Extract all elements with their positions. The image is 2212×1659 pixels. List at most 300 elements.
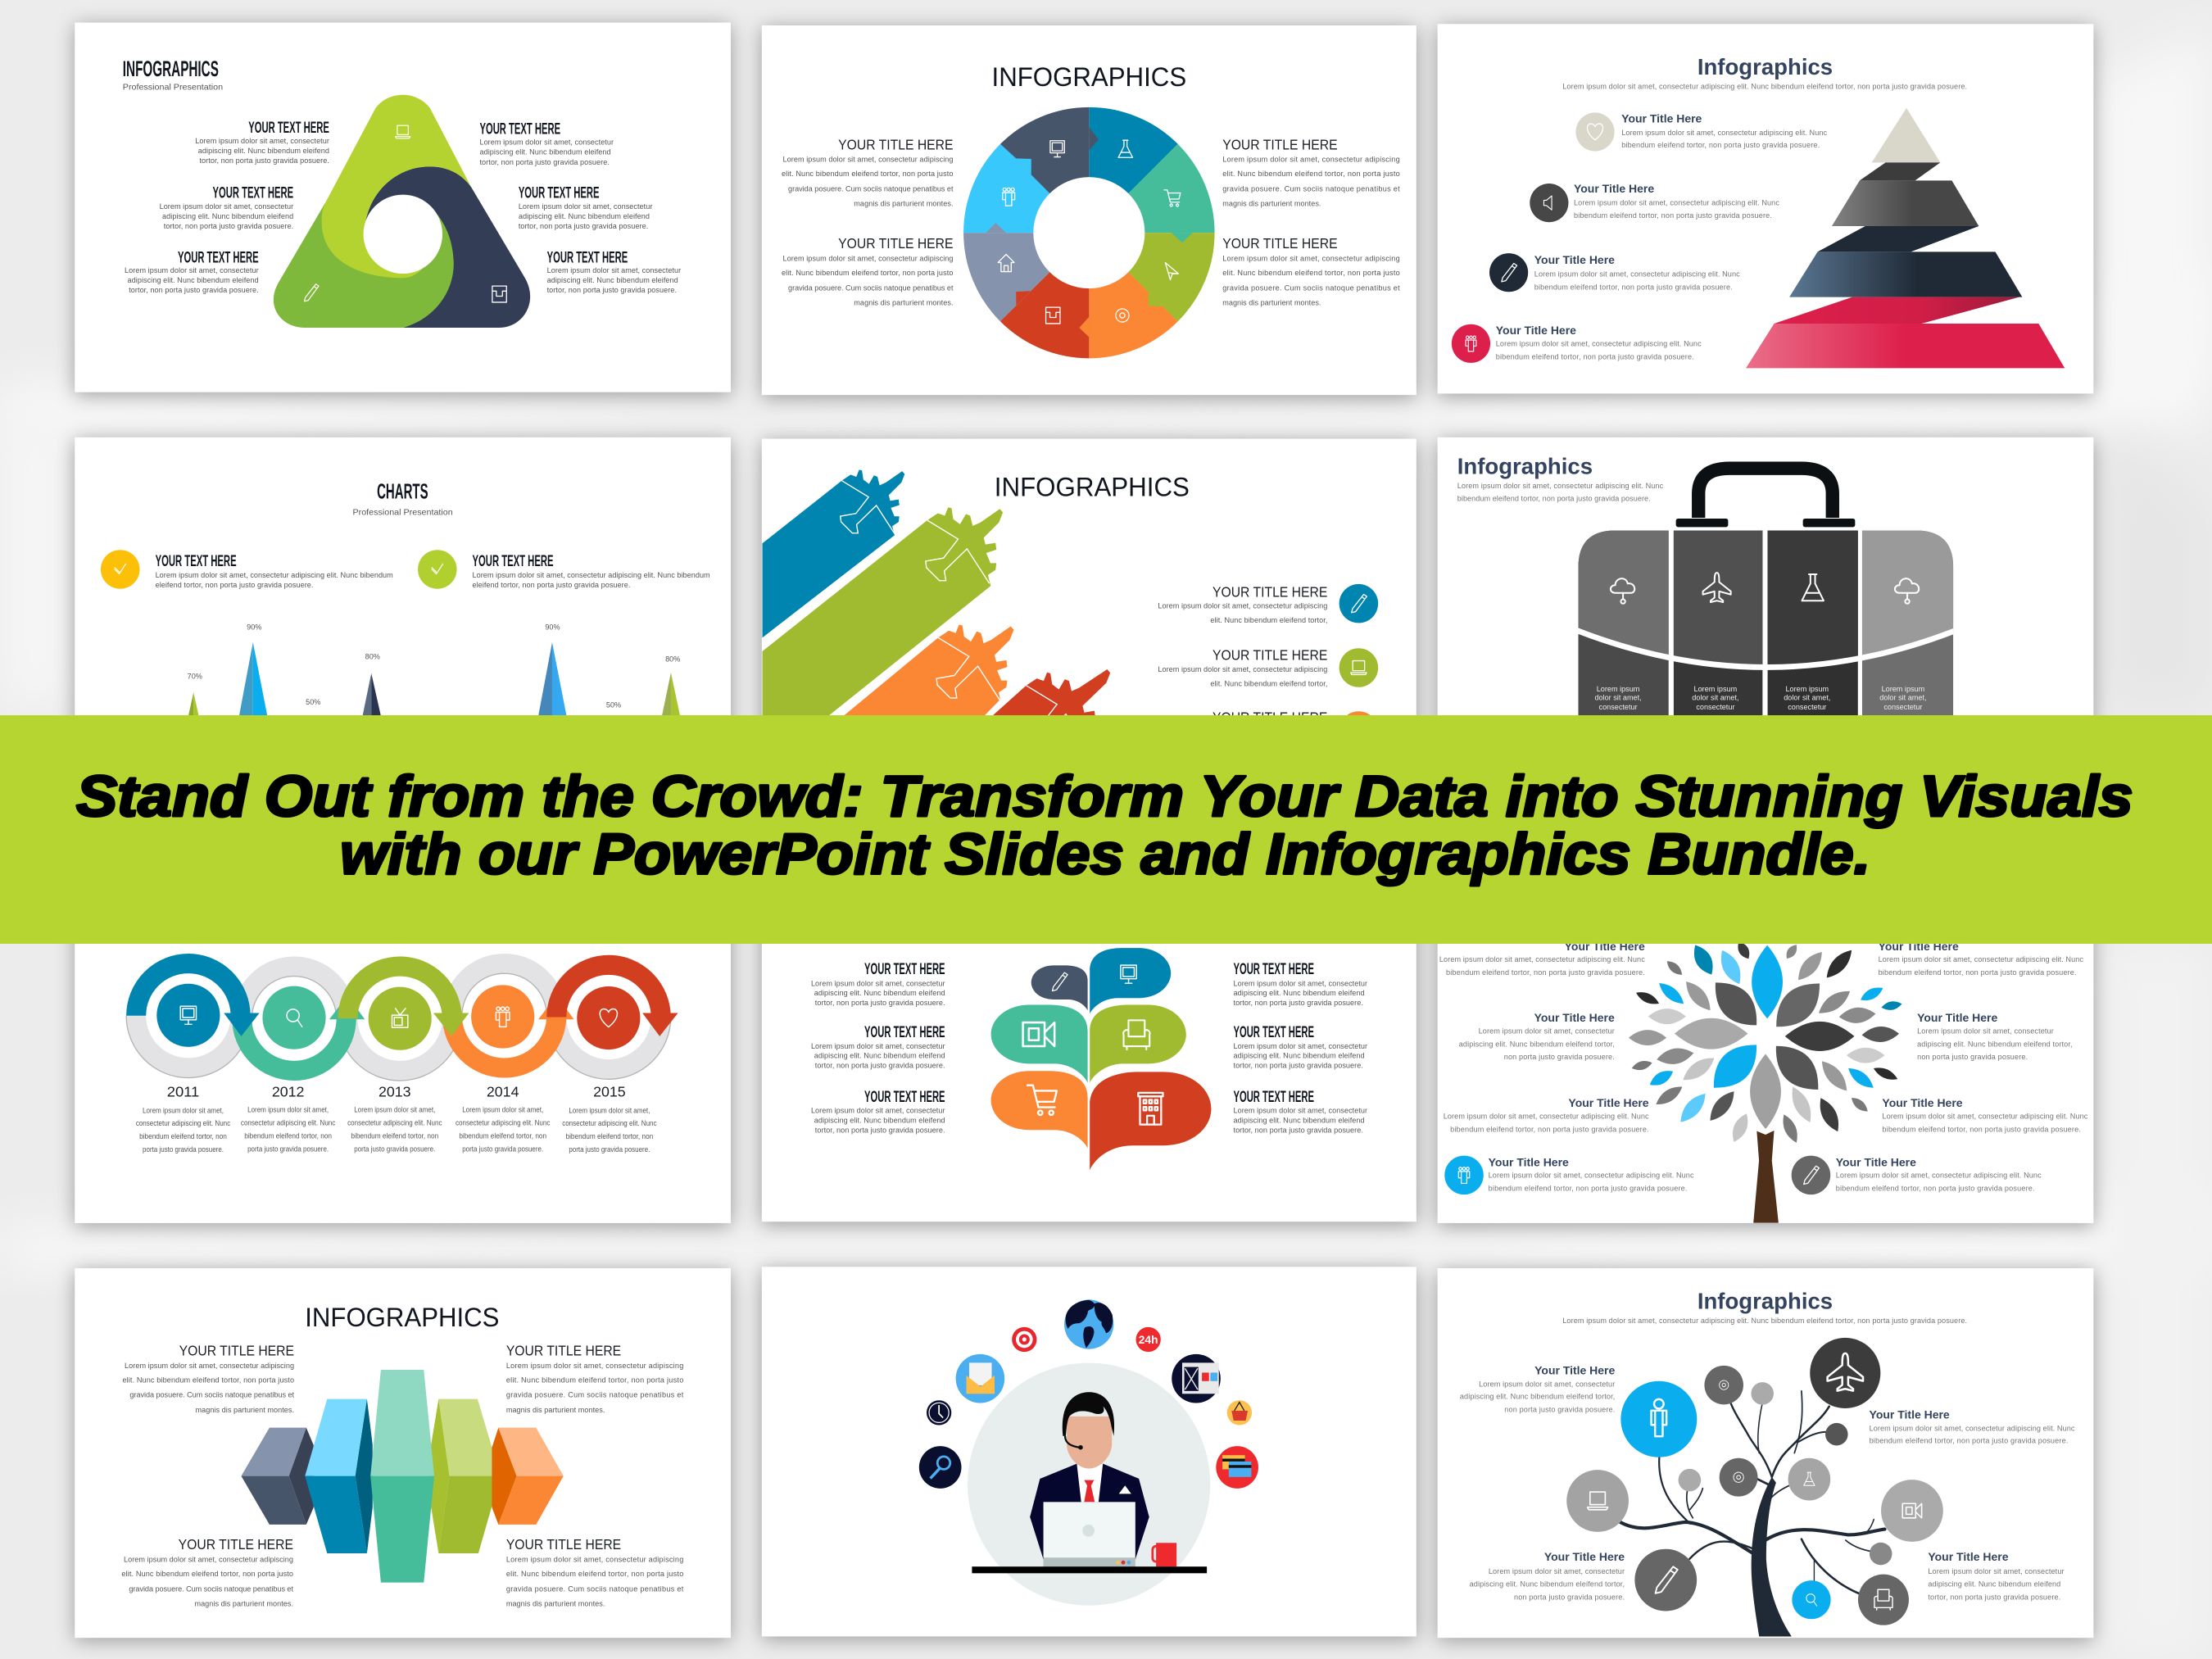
text block: left three <box>125 248 259 294</box>
panel: branch tree <box>1438 1268 2093 1641</box>
item: orange: YOUR TITLE HERE <box>1213 709 1327 726</box>
column text: Lorem ipsum <box>1694 685 1737 693</box>
item: orange <box>1213 709 1378 750</box>
text block: right two: Lorem ipsum dolor sit amet, consectetur <box>1233 1042 1367 1050</box>
icon: inbox <box>1046 307 1060 324</box>
text block: top right: YOUR TITLE HERE <box>1222 137 1338 153</box>
node: 2014: Lorem ipsum dolor sit amet, <box>462 1106 543 1114</box>
text block: top right: bibendum eleifend tortor, non porta justo gravida posuere. <box>1879 968 2077 977</box>
item: heart <box>1575 112 1828 152</box>
item: green check: Lorem ipsum dolor sit amet, consectetur adipiscing elit. Nunc bibendum <box>473 571 710 579</box>
icon: target <box>1012 1327 1036 1352</box>
text block: right two <box>1233 1023 1367 1070</box>
spike chart: 70% <box>188 672 202 680</box>
text block: bottom right: YOUR TITLE HERE <box>506 1536 621 1552</box>
arrow: blue <box>136 963 260 1036</box>
text block: bottom left: magnis dis parturient montes. <box>854 298 954 306</box>
text block: bottom right: adipiscing elit. Nunc bibendum eleifend <box>1928 1580 2060 1589</box>
panel: pyramid infographic <box>1438 24 2093 397</box>
node: 2014: bibendum eleifend tortor, non <box>459 1132 546 1140</box>
text block: lower left: Your Title Here <box>1568 1097 1649 1109</box>
text block: lower left: bibendum eleifend tortor, non porta justo gravida posuere. <box>1450 1126 1649 1134</box>
text block: right two: YOUR TEXT HERE <box>1233 1023 1314 1041</box>
panel: timeline <box>75 846 731 1226</box>
item: people: bibendum eleifend tortor, non porta justo gravida posuere. <box>1496 352 1694 360</box>
panel: charts <box>75 437 731 737</box>
node: 2012: Lorem ipsum dolor sit amet, <box>247 1106 329 1114</box>
text block: left three: YOUR TEXT HERE <box>178 248 259 266</box>
icon: house <box>998 254 1014 272</box>
node: 2011: Lorem ipsum dolor sit amet, <box>143 1106 224 1114</box>
icon: airplane <box>1828 1353 1863 1391</box>
item: pencil <box>1489 253 1740 292</box>
text block: bottom left: Your Title Here <box>1544 1551 1625 1563</box>
bubble: pencil <box>1031 965 1088 1010</box>
desk <box>972 1566 1207 1573</box>
text block: middle right: Lorem ipsum dolor sit amet, consectetur <box>1917 1027 2054 1036</box>
item: green: Lorem ipsum dolor sit amet, consectetur adipiscing <box>1158 665 1327 673</box>
text block: middle left: adipiscing elit. Nunc bibendum eleifend tortor, <box>1459 1040 1615 1048</box>
text block: middle left: non porta justo gravida posuere. <box>1504 1053 1615 1061</box>
tree trunk and branches <box>1620 1391 1885 1636</box>
text block: left one: adipiscing elit. Nunc bibendum eleifend <box>198 147 329 155</box>
text block: top right: Your Title Here <box>1879 941 1959 953</box>
bubble: chair <box>1090 1005 1186 1083</box>
spike chart: 80% <box>365 652 380 660</box>
item: people <box>1452 324 1702 363</box>
bubble: cart <box>991 1071 1088 1149</box>
text block: right one <box>479 120 614 166</box>
node: 2012: bibendum eleifend tortor, non <box>244 1132 332 1140</box>
icon: cart <box>1164 190 1181 206</box>
spike chart <box>188 623 680 716</box>
node: 2014: consectetur adipiscing elit. Nunc <box>456 1118 551 1126</box>
heading <box>1562 1289 1967 1325</box>
item: blue people: bibendum eleifend tortor, non porta justo gravida posuere. <box>1489 1184 1687 1192</box>
text block: top left: elit. Nunc bibendum eleifend tortor, non porta justo <box>122 1376 294 1384</box>
heading <box>1457 454 1664 502</box>
text block: bottom left <box>1470 1551 1625 1601</box>
timeline rings <box>126 963 671 1081</box>
text block: top right: Your Title Here <box>1870 1409 1950 1421</box>
icon: gear <box>1734 1472 1743 1482</box>
text block: left two: tortor, non porta justo gravida posuere. <box>164 222 293 230</box>
icon: person <box>1652 1399 1666 1436</box>
text block: top right <box>1870 1409 2075 1445</box>
item: people: Your Title Here <box>1496 324 1576 337</box>
text block: bottom left: magnis dis parturient montes. <box>194 1600 293 1608</box>
text block: middle right: adipiscing elit. Nunc bibendum eleifend tortor, <box>1917 1040 2073 1048</box>
text block: left one: Lorem ipsum dolor sit amet, consectetur <box>195 137 329 145</box>
text block: middle left <box>1459 1012 1615 1061</box>
icon: email <box>956 1354 1004 1403</box>
icon: plane <box>1703 573 1731 602</box>
node: 2011 <box>136 984 231 1154</box>
heading: infographics <box>123 57 223 92</box>
text block: middle left: Lorem ipsum dolor sit amet, consectetur <box>1479 1027 1615 1036</box>
text block: top right: Lorem ipsum dolor sit amet, consectetur adipiscing <box>1222 156 1400 164</box>
text block: right two: Lorem ipsum dolor sit amet, consectetur <box>519 202 652 211</box>
item: pencil: Lorem ipsum dolor sit amet, consectetur adipiscing elit. Nunc <box>1534 270 1740 279</box>
text block: left one: adipiscing elit. Nunc bibendum eleifend <box>814 989 945 997</box>
item: green check: eleifend tortor, non porta justo gravida posuere. <box>473 581 630 589</box>
text block: top left: Your Title Here <box>1565 941 1645 953</box>
text block: right three: YOUR TEXT HERE <box>1233 1088 1314 1106</box>
text block: bottom right: Your Title Here <box>1928 1551 2009 1563</box>
text block: top right: gravida posuere. Cum sociis natoque penatibus et <box>1222 184 1400 193</box>
item: blue: elit. Nunc bibendum eleifend tortor, <box>1210 616 1327 624</box>
icon: credit cards <box>1216 1446 1258 1489</box>
bubble: building <box>1090 1072 1211 1170</box>
text block: middle right <box>1917 1012 2073 1061</box>
text block: top right <box>506 1342 684 1414</box>
stripe: blue <box>763 469 904 637</box>
item: speaker: Your Title Here <box>1574 183 1654 195</box>
icon: cloud <box>1895 578 1919 604</box>
spike chart: 90% <box>545 623 560 631</box>
text block: left one: YOUR TEXT HERE <box>864 960 945 978</box>
text block: bottom right: tortor, non porta justo gravida posuere. <box>1928 1593 2060 1601</box>
item: yellow check: eleifend tortor, non porta justo gravida posuere. <box>156 581 313 589</box>
text block: top left: Your Title Here <box>1534 1364 1615 1376</box>
arrow: green <box>347 967 469 1036</box>
column text: Lorem ipsum <box>1597 685 1639 693</box>
column text: consectetur <box>1599 703 1638 711</box>
text block: top left: Lorem ipsum dolor sit amet, consectetur adipiscing <box>783 156 954 164</box>
text block: bottom right <box>506 1536 684 1608</box>
item: blue: YOUR TITLE HERE <box>1213 583 1327 600</box>
icon: search <box>919 1446 962 1489</box>
bar: teal <box>370 1370 434 1583</box>
item: yellow check: Lorem ipsum dolor sit amet, consectetur adipiscing elit. Nunc bibendum <box>156 571 393 579</box>
bubble: video <box>991 1005 1088 1083</box>
text block: right two: adipiscing elit. Nunc bibendum eleifend <box>519 212 650 220</box>
text block: top right: Lorem ipsum dolor sit amet, consectetur adipiscing <box>506 1362 683 1370</box>
spike chart: 50% <box>606 700 621 709</box>
node: 2011: consectetur adipiscing elit. Nunc <box>136 1119 231 1127</box>
column text: dolor sit amet, <box>1879 694 1927 702</box>
item: blue people <box>1444 1156 1694 1194</box>
text block: bottom left: YOUR TITLE HERE <box>179 1536 293 1552</box>
text block: left two: tortor, non porta justo gravida posuere. <box>815 1062 945 1070</box>
text block: bottom right: Lorem ipsum dolor sit amet, consectetur adipiscing <box>1222 254 1400 262</box>
text block: bottom right: Lorem ipsum dolor sit amet, consectetur <box>1928 1567 2065 1575</box>
item: blue: Lorem ipsum dolor sit amet, consectetur adipiscing <box>1158 601 1327 610</box>
banner headline <box>76 764 2133 886</box>
column text: Lorem ipsum <box>1785 685 1829 693</box>
column text: consectetur <box>1696 703 1734 711</box>
text block: right two <box>519 184 652 230</box>
node: 2015: bibendum eleifend tortor, non <box>565 1132 653 1140</box>
item: yellow check: YOUR TEXT HERE <box>156 552 237 570</box>
text block: right one: adipiscing elit. Nunc bibendum eleifend <box>479 148 611 156</box>
text block: bottom right: elit. Nunc bibendum eleifend tortor, non porta justo <box>1222 269 1400 277</box>
bar: orange <box>492 1428 564 1525</box>
text block: top left: gravida posuere. Cum sociis natoque penatibus et <box>129 1391 294 1399</box>
item: speaker: bibendum eleifend tortor, non porta justo gravida posuere. <box>1574 211 1772 220</box>
panel: 3d bars <box>75 1268 731 1641</box>
text block: bottom left: YOUR TITLE HERE <box>838 235 954 252</box>
icon: video <box>1902 1503 1922 1518</box>
column text: consectetur <box>1788 703 1826 711</box>
text block: bottom right: gravida posuere. Cum sociis natoque penatibus et <box>1222 283 1400 292</box>
text block: top right: elit. Nunc bibendum eleifend tortor, non porta justo <box>1222 170 1400 178</box>
item: speaker: Lorem ipsum dolor sit amet, consectetur adipiscing elit. Nunc <box>1574 199 1779 207</box>
node: 2013: 2013 <box>378 1083 411 1099</box>
text block: bottom left: Lorem ipsum dolor sit amet, consectetur adipiscing <box>783 254 954 262</box>
heading: infographics: Professional Presentation <box>123 83 223 92</box>
item: green check: YOUR TEXT HERE <box>473 552 554 570</box>
text block: bottom left: gravida posuere. Cum sociis natoque penatibus et <box>788 283 954 292</box>
node: 2015 <box>562 986 657 1154</box>
icon: search <box>1806 1594 1817 1606</box>
text block: top right: elit. Nunc bibendum eleifend tortor, non porta justo <box>506 1376 683 1384</box>
item: yellow check <box>101 550 393 589</box>
bar: green <box>431 1399 501 1553</box>
item: blue people: Lorem ipsum dolor sit amet, consectetur adipiscing elit. Nunc <box>1489 1172 1694 1180</box>
item: people: Lorem ipsum dolor sit amet, consectetur adipiscing elit. Nunc <box>1496 340 1702 348</box>
text block: left two: YOUR TEXT HERE <box>864 1023 945 1041</box>
panel: plane stripes <box>762 439 1416 750</box>
text block: right one: adipiscing elit. Nunc bibendum eleifend <box>1233 989 1365 997</box>
item: green: YOUR TITLE HERE <box>1213 647 1327 664</box>
triangle diagram <box>274 95 530 328</box>
briefcase handle <box>1676 469 1855 527</box>
item: green: elit. Nunc bibendum eleifend tortor, <box>1210 679 1327 687</box>
text block: top left <box>122 1342 294 1414</box>
text block: left two: YOUR TEXT HERE <box>212 184 293 202</box>
text block: right one: tortor, non porta justo gravida posuere. <box>479 158 610 166</box>
text block: right three <box>547 248 681 294</box>
icon: pencil <box>304 284 319 301</box>
icon: globe <box>1064 1299 1113 1349</box>
text block: left three: tortor, non porta justo gravida posuere. <box>815 1126 945 1135</box>
banner headline: Stand Out from the Crowd: Transform Your Data into Stunning Visuals <box>76 764 2133 828</box>
text block: bottom right: gravida posuere. Cum sociis natoque penatibus et <box>506 1584 684 1593</box>
text block: top left: non porta justo gravida posuere. <box>1504 1405 1615 1413</box>
text block: top left: bibendum eleifend tortor, non porta justo gravida posuere. <box>1446 968 1645 977</box>
bar: slate <box>241 1428 314 1525</box>
heading: INFOGRAPHICS <box>995 472 1190 502</box>
text block: left one: tortor, non porta justo gravida posuere. <box>815 999 945 1007</box>
icon: gear <box>1116 309 1129 322</box>
icon: laptop <box>1588 1492 1607 1510</box>
icon: cloud <box>1611 578 1634 604</box>
item: gray pencil: Your Title Here <box>1836 1156 1916 1168</box>
text block: bottom right: Lorem ipsum dolor sit amet, consectetur adipiscing <box>506 1556 683 1564</box>
text block: left two: Lorem ipsum dolor sit amet, consectetur <box>160 202 293 211</box>
panel: leaf tree <box>1438 846 2093 1226</box>
text block: bottom left <box>121 1536 293 1608</box>
icon: basket <box>1227 1400 1252 1426</box>
icon: flask <box>1118 140 1132 157</box>
businessman <box>1030 1392 1149 1559</box>
text block: right three: adipiscing elit. Nunc bibendum eleifend <box>1233 1116 1365 1124</box>
icon: inbox <box>492 286 506 302</box>
node: 2012: 2012 <box>272 1083 304 1099</box>
icon: chair <box>1874 1589 1892 1610</box>
text block: bottom left: elit. Nunc bibendum eleifend tortor, non porta justo <box>782 269 954 277</box>
heading: Infographics <box>1698 54 1833 79</box>
red mug <box>1153 1543 1176 1566</box>
text block: left three: YOUR TEXT HERE <box>864 1088 945 1106</box>
text block: top right: magnis dis parturient montes. <box>1222 200 1321 208</box>
text block: top right: bibendum eleifend tortor, non porta justo gravida posuere. <box>1870 1437 2068 1445</box>
node: 2013 <box>347 987 442 1153</box>
donut chart <box>963 107 1215 358</box>
spike chart: 80% <box>665 655 680 664</box>
node: 2014 <box>456 985 551 1153</box>
text block: left three: Lorem ipsum dolor sit amet, consectetur <box>125 266 259 274</box>
bubble: monitor <box>1090 948 1171 1013</box>
heading: INFOGRAPHICS <box>992 61 1186 92</box>
text block: right one: Lorem ipsum dolor sit amet, consectetur <box>479 138 614 147</box>
text block: left one: Lorem ipsum dolor sit amet, consectetur <box>811 979 945 987</box>
item: speaker <box>1530 183 1779 222</box>
node: 2014: porta justo gravida posuere. <box>462 1145 543 1153</box>
text block: top left: YOUR TITLE HERE <box>179 1342 294 1358</box>
panel: speech bubble tree <box>762 846 1416 1225</box>
text block: top left: Lorem ipsum dolor sit amet, consectetur adipiscing elit. Nunc <box>1439 955 1645 963</box>
text block: right three: tortor, non porta justo gravida posuere. <box>1233 1126 1363 1135</box>
branch circles <box>1566 1338 1943 1625</box>
text block: lower left <box>1444 1097 1649 1134</box>
arrow: red <box>556 965 678 1036</box>
text block: left three <box>811 1088 945 1135</box>
text block: bottom right: magnis dis parturient montes. <box>1222 298 1321 306</box>
node: 2015: porta justo gravida posuere. <box>569 1145 650 1154</box>
node: 2013: bibendum eleifend tortor, non <box>351 1132 438 1140</box>
text block: right three: adipiscing elit. Nunc bibendum eleifend <box>547 276 678 284</box>
node: 2015: Lorem ipsum dolor sit amet, <box>569 1106 650 1114</box>
text block: right two: YOUR TEXT HERE <box>519 184 599 202</box>
text block: bottom right: elit. Nunc bibendum eleifend tortor, non porta justo <box>506 1570 683 1578</box>
spike chart: 90% <box>247 623 261 631</box>
icon: flask <box>1802 574 1824 601</box>
icon: pencil <box>1656 1566 1678 1593</box>
text block: right one: Lorem ipsum dolor sit amet, consectetur <box>1233 979 1367 987</box>
tree leaves <box>1629 939 1902 1145</box>
text block: bottom left: elit. Nunc bibendum eleifend tortor, non porta justo <box>121 1570 293 1578</box>
icon: laptop <box>396 125 410 138</box>
text block: lower right: Your Title Here <box>1882 1097 1963 1109</box>
node: 2013: porta justo gravida posuere. <box>354 1145 435 1153</box>
node: 2012: porta justo gravida posuere. <box>247 1145 329 1153</box>
text block: bottom left: Lorem ipsum dolor sit amet, consectetur adipiscing <box>124 1556 293 1564</box>
text block: top left: gravida posuere. Cum sociis natoque penatibus et <box>788 184 954 193</box>
heading: Lorem ipsum dolor sit amet, consectetur adipiscing elit. Nunc bibendum eleifend tortor, non porta justo gravida posuere. <box>1562 83 1967 91</box>
text block: top left <box>782 137 954 208</box>
heading: Lorem ipsum dolor sit amet, consectetur adipiscing elit. Nunc <box>1457 482 1664 490</box>
spike chart: 50% <box>306 698 320 706</box>
text block: bottom left: gravida posuere. Cum sociis natoque penatibus et <box>129 1584 293 1593</box>
text block: left one: YOUR TEXT HERE <box>248 119 329 137</box>
text block: bottom right <box>1222 235 1400 306</box>
text block: top right <box>1222 137 1400 208</box>
item: green check <box>418 550 710 589</box>
item: pencil: bibendum eleifend tortor, non porta justo gravida posuere. <box>1534 283 1733 291</box>
item: pencil: Your Title Here <box>1534 254 1615 266</box>
panel: donut infographic <box>762 25 1416 398</box>
text block: lower right <box>1882 1097 2088 1134</box>
text block: right one: YOUR TEXT HERE <box>479 120 560 138</box>
heading: charts: CHARTS <box>377 481 428 504</box>
stripe: orange <box>843 624 1013 717</box>
column text: dolor sit amet, <box>1594 694 1642 702</box>
item: heart: Your Title Here <box>1621 112 1702 125</box>
item: heart: Lorem ipsum dolor sit amet, consectetur adipiscing elit. Nunc <box>1621 129 1828 137</box>
stripe: red <box>991 669 1110 749</box>
icon: paper plane <box>1165 262 1178 280</box>
text block: lower left: Lorem ipsum dolor sit amet, consectetur adipiscing elit. Nunc <box>1444 1112 1649 1120</box>
heading: INFOGRAPHICS <box>305 1302 499 1332</box>
item: blue <box>1158 583 1378 624</box>
text block: top left <box>1460 1364 1615 1413</box>
arrow: teal <box>242 995 365 1071</box>
column text: dolor sit amet, <box>1784 694 1830 702</box>
text block: left three: tortor, non porta justo gravida posuere. <box>129 286 259 294</box>
column text <box>1594 685 1927 711</box>
column text: consectetur <box>1883 703 1922 711</box>
heading: Infographics <box>1457 454 1593 479</box>
text block: middle right: Your Title Here <box>1917 1012 1997 1024</box>
text block: left two <box>160 184 293 230</box>
text block: top left <box>1439 941 1645 977</box>
node: 2011: bibendum eleifend tortor, non <box>139 1132 227 1140</box>
icon: monitor <box>1050 141 1064 157</box>
item: blue people: Your Title Here <box>1489 1156 1569 1168</box>
pyramid chart <box>1746 108 2065 368</box>
text block: top right: Lorem ipsum dolor sit amet, consectetur adipiscing elit. Nunc <box>1870 1425 2075 1433</box>
text block: left two: Lorem ipsum dolor sit amet, consectetur <box>811 1042 945 1050</box>
text block: bottom right: magnis dis parturient montes. <box>506 1600 605 1608</box>
tree trunk <box>1753 1131 1779 1223</box>
item: gray pencil: Lorem ipsum dolor sit amet, consectetur adipiscing elit. Nunc <box>1836 1172 2042 1180</box>
icon: flask <box>1804 1472 1815 1485</box>
text block: right three: Lorem ipsum dolor sit amet, consectetur <box>1233 1107 1367 1115</box>
text block: top right: YOUR TITLE HERE <box>506 1342 621 1358</box>
heading <box>1562 54 1967 91</box>
text block: lower right: bibendum eleifend tortor, non porta justo gravida posuere. <box>1882 1126 2081 1134</box>
bar: blue <box>305 1399 373 1553</box>
panel: triangle infographic <box>75 23 731 395</box>
icon: browser <box>1172 1354 1221 1403</box>
text block: top left: Lorem ipsum dolor sit amet, consectetur adipiscing <box>125 1362 294 1370</box>
text block: lower right: Lorem ipsum dolor sit amet, consectetur adipiscing elit. Nunc <box>1882 1112 2088 1120</box>
text block: left two <box>811 1023 945 1070</box>
item: heart: bibendum eleifend tortor, non porta justo gravida posuere. <box>1621 141 1820 149</box>
text block: right two: tortor, non porta justo gravida posuere. <box>1233 1062 1363 1070</box>
text block: left one <box>195 119 329 165</box>
text block: right three <box>1233 1088 1367 1135</box>
node: 2012: consectetur adipiscing elit. Nunc <box>241 1118 336 1126</box>
banner headline: with our PowerPoint Slides and Infographics Bundle. <box>340 822 1870 886</box>
node: 2011: 2011 <box>167 1083 199 1099</box>
item: gray pencil <box>1792 1156 2042 1194</box>
banner <box>0 715 2212 944</box>
text block: top right: gravida posuere. Cum sociis natoque penatibus et <box>506 1391 684 1399</box>
text block: right two: tortor, non porta justo gravida posuere. <box>519 222 648 230</box>
text block: middle right: non porta justo gravida posuere. <box>1917 1053 2028 1061</box>
panel: businessman illustration <box>762 1267 1416 1639</box>
text block: left three: adipiscing elit. Nunc bibendum eleifend <box>127 276 259 284</box>
node: 2013: consectetur adipiscing elit. Nunc <box>347 1118 442 1126</box>
text block: bottom left <box>782 235 954 306</box>
text block: right three: YOUR TEXT HERE <box>547 248 628 266</box>
heading: charts: Professional Presentation <box>352 508 453 517</box>
text block: bottom left: adipiscing elit. Nunc bibendum eleifend tortor, <box>1470 1580 1625 1589</box>
text block: top right: magnis dis parturient montes. <box>506 1406 605 1414</box>
